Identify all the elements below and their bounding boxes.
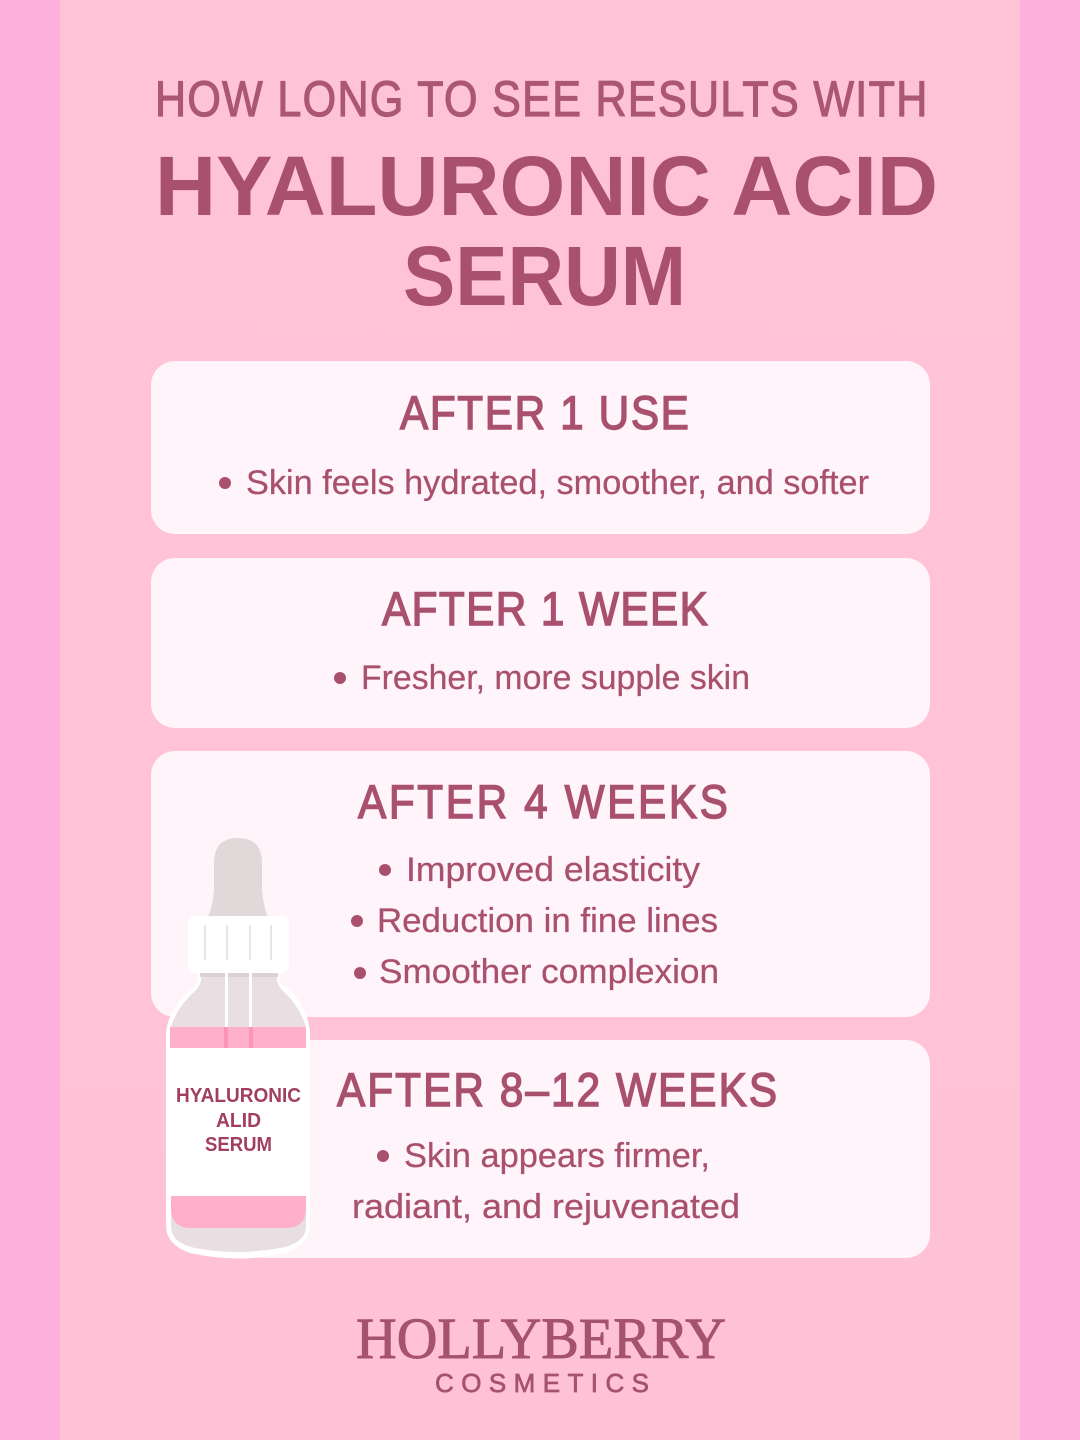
bullet list: radiant, and rejuvenated xyxy=(352,1188,740,1226)
panel: after 4 weeks xyxy=(151,751,930,1017)
bullet text: Skin feels hydrated, smoother, and softer xyxy=(246,464,869,502)
bullet list xyxy=(351,851,719,991)
title xyxy=(155,71,938,323)
bottle white outline xyxy=(166,970,310,1258)
brand subline: COSMETICS xyxy=(435,1368,649,1398)
brand name: HOLLYBERRY xyxy=(356,1306,726,1371)
bullet list: Skin appears firmer, xyxy=(404,1137,710,1175)
bullet list: Smoother complexion xyxy=(379,953,719,991)
title line 3: SERUM xyxy=(403,229,686,323)
panel: after 8-12 weeks xyxy=(240,1040,930,1258)
icon: serum bottle xyxy=(166,838,310,1258)
bullet list: Reduction in fine lines xyxy=(377,902,718,940)
panel: after 1 use xyxy=(151,361,930,534)
heading: AFTER 8–12 WEEKS xyxy=(337,1065,777,1117)
bullet text: Fresher, more supple skin xyxy=(361,659,750,697)
label text: ALID xyxy=(216,1110,261,1132)
cap ridges xyxy=(205,925,271,960)
heading: AFTER 4 WEEKS xyxy=(358,777,728,829)
title line 1: HOW LONG TO SEE RESULTS WITH xyxy=(155,71,927,127)
white cap xyxy=(188,916,289,973)
pink band upper xyxy=(170,1027,306,1048)
pink band lower xyxy=(171,1196,306,1228)
heading: AFTER 1 WEEK xyxy=(382,584,708,636)
label text: SERUM xyxy=(205,1134,272,1156)
panel: after 1 week xyxy=(151,558,930,728)
label text xyxy=(176,1085,301,1156)
label text: HYALURONIC xyxy=(176,1085,301,1107)
heading: AFTER 1 USE xyxy=(400,388,689,440)
dropper tube lines xyxy=(224,972,253,1048)
bottle base xyxy=(171,1196,306,1252)
title line 2: HYALURONIC ACID xyxy=(155,139,938,233)
glass upper xyxy=(171,976,306,1027)
brand logo xyxy=(356,1306,726,1398)
rubber dropper bulb xyxy=(208,838,268,917)
bullet list: Improved elasticity xyxy=(406,851,700,889)
bullet list xyxy=(352,1137,740,1226)
neck collar xyxy=(200,972,278,977)
